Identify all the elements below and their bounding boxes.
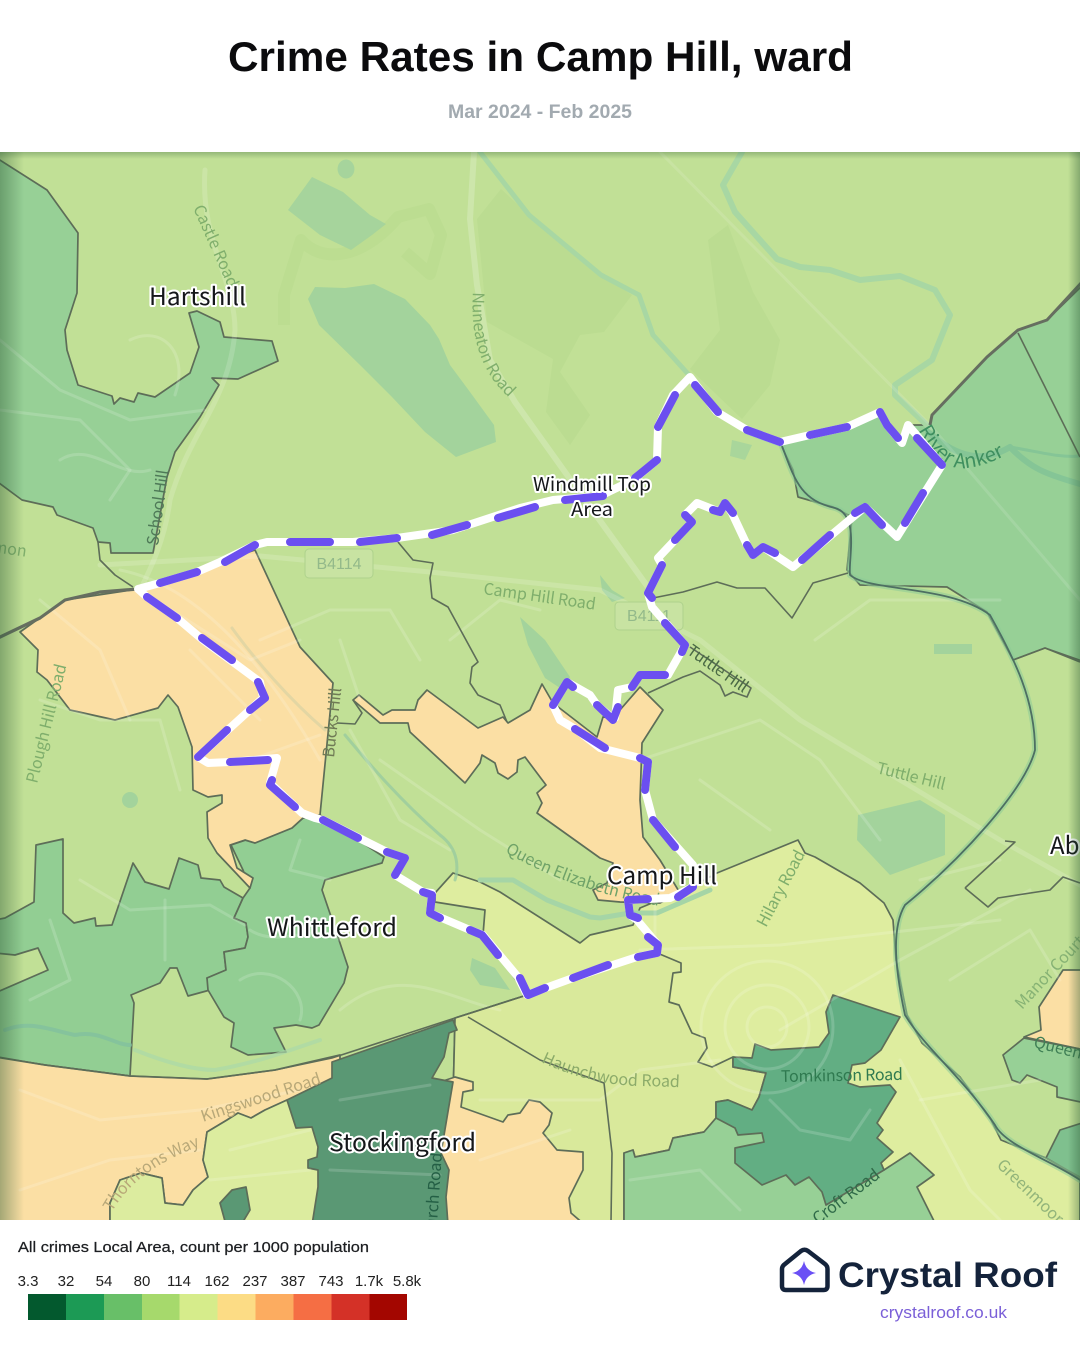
- legend values: 32: [58, 1273, 74, 1290]
- legend colour scale: [28, 1294, 407, 1320]
- area: orange east of Stockingford: [440, 1077, 585, 1225]
- road labels: Greenmoor: [993, 1152, 1071, 1229]
- road labels: Camp Hill Road: [482, 575, 598, 615]
- place labels: Area: [571, 495, 613, 522]
- area: pale pocket Kingswood: [110, 1100, 320, 1225]
- area: Tomkinson green: [716, 995, 900, 1205]
- legend: [18, 1239, 422, 1320]
- road labels: Tuttle Hill: [683, 637, 754, 697]
- street network: [0, 152, 1080, 1220]
- road shields: [305, 549, 683, 630]
- legend values: 114: [167, 1273, 191, 1290]
- icon: house with star: [782, 1250, 828, 1290]
- ward boundary lines: [0, 282, 1080, 1222]
- road labels: Plough Hill Road: [19, 661, 71, 785]
- place labels: Windmill Top: [533, 470, 651, 497]
- road labels: Haunchwood Road: [542, 1052, 679, 1088]
- road labels: Kingswood Road: [197, 1065, 323, 1127]
- legend values: 162: [204, 1273, 230, 1290]
- rivers: [5, 152, 1080, 1180]
- area: pale yellow Haunchwood: [450, 953, 766, 1225]
- place labels: Whittleford: [267, 908, 397, 943]
- road labels: Tuttle Hill: [875, 755, 949, 795]
- legend values: 237: [242, 1273, 268, 1290]
- road labels: Hilary Road: [749, 845, 810, 930]
- legend title: All crimes Local Area, count per 1000 population: [18, 1239, 369, 1256]
- road labels: Croft Road: [806, 1162, 884, 1229]
- subtitle: date range: Mar 2024 - Feb 2025: [448, 102, 632, 123]
- area: east medium green upper: [1003, 1038, 1080, 1103]
- road labels: Castle Road: [188, 200, 246, 290]
- ward boundary route: Camp Hill: [138, 377, 942, 995]
- road labels: School Hill: [139, 468, 174, 547]
- parks and water bodies: [122, 160, 972, 990]
- road labels: Nuneaton Road: [472, 294, 517, 396]
- area: Whittleford medium green: [207, 815, 384, 1055]
- road labels: Tomkinson Road: [781, 1061, 903, 1087]
- logo: Crystal Roof: [782, 1250, 1057, 1322]
- website url: crystalroof.co.uk: [880, 1304, 1008, 1322]
- area: south medium green: [624, 1118, 936, 1225]
- road labels: Church Road: [416, 1152, 447, 1249]
- place labels: Stockingford: [329, 1123, 476, 1158]
- road labels: Bucks Hill: [315, 686, 346, 759]
- shield: B4114: B4114: [316, 556, 362, 573]
- legend values: 743: [318, 1273, 344, 1290]
- shield: B4111: B4111: [627, 608, 671, 625]
- legend values: 5.8k: [393, 1273, 422, 1290]
- road labels: Queen Elizabeth Road: [508, 844, 660, 906]
- shield: B4114: [305, 549, 373, 578]
- place labels: Ab: [1050, 826, 1079, 861]
- legend values: 3.3: [18, 1273, 38, 1290]
- area: Hartshill medium green: [0, 157, 278, 553]
- legend values: 54: [96, 1273, 112, 1290]
- area: River Anker medium green: [780, 283, 1080, 662]
- legend values: 1.7k: [355, 1273, 384, 1290]
- area: Whittleford west medium green: [0, 839, 248, 1076]
- legend values: 80: [134, 1273, 150, 1290]
- shield: B4111: [615, 602, 683, 630]
- legend values: 387: [280, 1273, 306, 1290]
- road labels: [0, 206, 1080, 1272]
- area: pale yellow south-east: [435, 840, 1080, 1225]
- area: west orange: [20, 550, 333, 888]
- map edge shading: [0, 152, 1080, 1220]
- area: east orange: [1024, 970, 1080, 1050]
- road labels: Thorntons Way: [102, 1138, 197, 1208]
- title: Crime Rates in Camp Hill, ward: [228, 33, 853, 80]
- area: central orange Camp Hill: [353, 684, 680, 903]
- area: south-west orange band: [0, 1055, 340, 1225]
- legend values: [18, 1273, 422, 1290]
- area: Stockingford dark green: [287, 1020, 457, 1225]
- road labels: River Anker: [919, 424, 1001, 468]
- woodland shading: [477, 189, 780, 445]
- area: east medium green lower: [1046, 1122, 1080, 1180]
- place labels: Camp Hill: [607, 856, 717, 891]
- place labels: Hartshill: [149, 277, 246, 312]
- place labels: [149, 277, 1079, 1158]
- wordmark: Crystal Roof: [838, 1256, 1057, 1295]
- area: small dark patch: [220, 1187, 250, 1225]
